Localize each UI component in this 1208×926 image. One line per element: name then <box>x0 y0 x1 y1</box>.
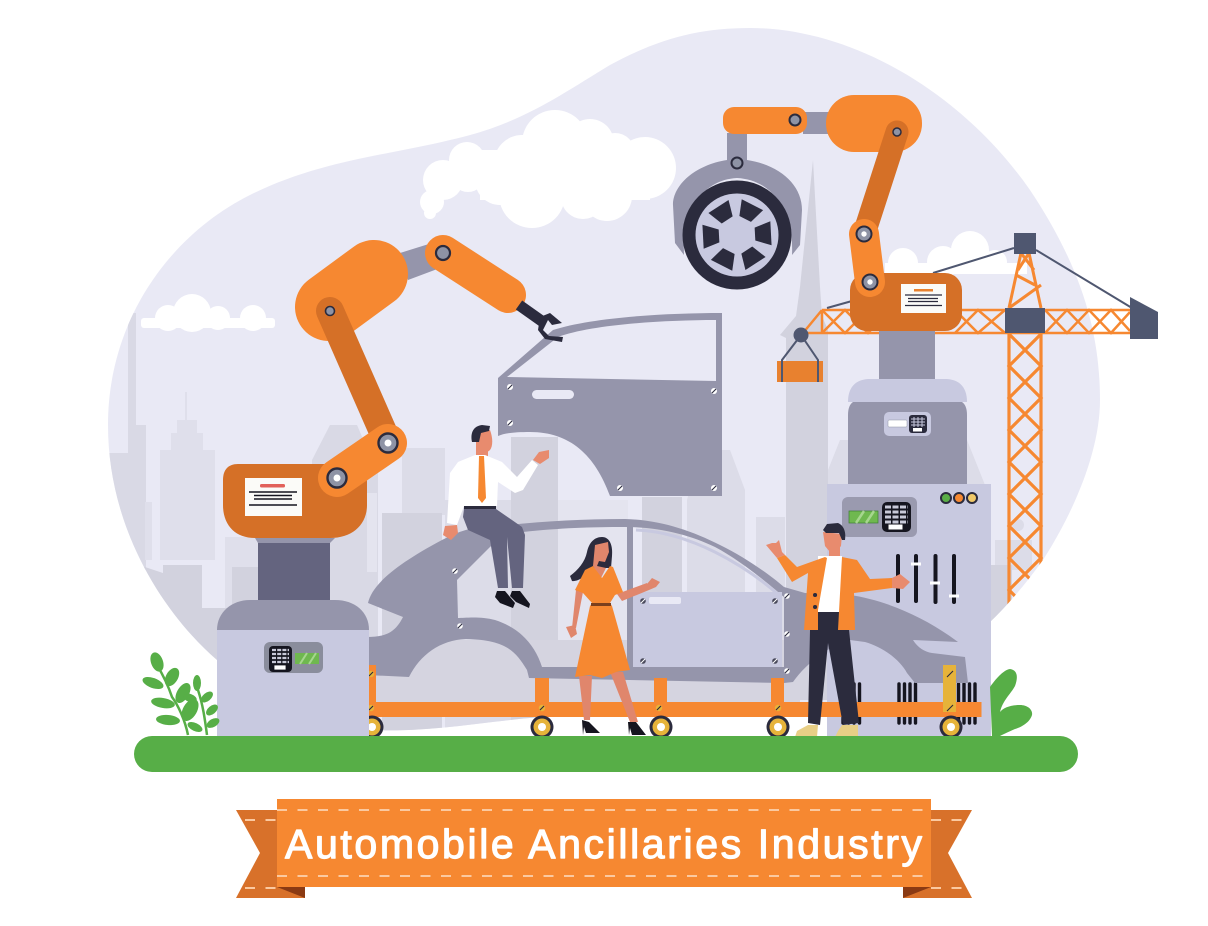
assembly cart <box>360 665 982 738</box>
shoulder <box>329 274 374 307</box>
base control panel <box>264 642 323 673</box>
banner title: Automobile Ancillaries Industry <box>285 821 922 867</box>
shoulder <box>826 95 922 152</box>
b pillar <box>627 527 633 669</box>
plant left <box>141 651 221 735</box>
cart screws <box>368 671 953 711</box>
car screws <box>452 568 790 674</box>
dome cap <box>848 379 967 402</box>
vents <box>843 684 975 723</box>
shirt <box>447 455 538 525</box>
car door handle <box>649 597 681 604</box>
window trim <box>636 530 780 596</box>
crane top box <box>1014 233 1036 254</box>
tie <box>478 456 486 503</box>
man seated on car <box>443 425 549 608</box>
forearm joint <box>790 114 800 126</box>
upper arm <box>330 311 388 443</box>
banner stitches <box>245 810 963 888</box>
head <box>471 425 492 452</box>
tyre clamp <box>673 133 802 255</box>
robot body <box>850 273 962 331</box>
crane jib lattice <box>803 310 1130 333</box>
gray link <box>400 243 440 280</box>
body label <box>901 284 946 313</box>
belt <box>591 603 611 606</box>
background blob <box>108 28 1100 730</box>
indicator lights <box>941 493 977 503</box>
trousers <box>808 610 859 725</box>
tower crane <box>777 233 1158 640</box>
arms <box>566 578 660 638</box>
machine cabinet <box>827 484 991 736</box>
counterweight <box>1130 297 1158 339</box>
forearm <box>443 253 508 295</box>
joints <box>326 246 450 488</box>
crane top frame <box>1009 253 1041 308</box>
gripper <box>519 305 563 342</box>
head <box>823 523 845 552</box>
dome panel <box>884 412 931 436</box>
legs <box>579 672 638 722</box>
control panel <box>842 497 917 537</box>
large smoke cloud <box>420 110 676 228</box>
car door <box>498 313 722 496</box>
left robot arm <box>217 243 563 736</box>
hands <box>766 540 910 589</box>
ground strip <box>134 736 1078 772</box>
forearm <box>723 107 807 134</box>
right machine <box>827 379 991 736</box>
door handle <box>532 390 574 399</box>
city skyline <box>100 160 1032 740</box>
upper arm <box>864 132 897 234</box>
hair <box>570 537 612 581</box>
cart rail <box>369 702 982 717</box>
woman <box>566 537 660 735</box>
heels <box>582 720 646 735</box>
dress <box>575 566 630 678</box>
base cabinet <box>217 630 369 736</box>
trousers <box>463 509 525 588</box>
t-shirt <box>818 556 842 612</box>
front door panel <box>633 592 782 667</box>
left cloud <box>141 294 275 332</box>
sliders <box>898 556 959 602</box>
jacket buttons <box>813 595 817 607</box>
lower arm <box>864 234 870 282</box>
face <box>593 542 609 578</box>
banner folds <box>277 887 931 898</box>
car body shell <box>367 519 968 683</box>
banner tails <box>236 810 305 898</box>
dome body <box>848 402 967 485</box>
body <box>223 464 367 538</box>
banner main <box>277 799 931 887</box>
crane cables <box>827 248 1132 308</box>
tyre <box>682 180 792 290</box>
joints <box>856 128 901 290</box>
arm connector <box>803 112 830 134</box>
neck <box>258 542 330 600</box>
hands and neck <box>443 448 549 540</box>
belt <box>464 506 496 510</box>
shoes <box>495 591 530 608</box>
lower arm <box>337 443 388 478</box>
right cloud <box>885 231 1027 278</box>
right robot arm <box>673 95 962 379</box>
crane centre box <box>1005 308 1045 333</box>
base dome <box>217 600 369 630</box>
man with jacket <box>766 523 910 737</box>
cart posts <box>369 665 784 702</box>
collar <box>255 538 335 543</box>
yellow clamp <box>943 665 956 712</box>
clouds <box>141 110 1027 332</box>
body label <box>245 478 302 516</box>
plant right <box>990 669 1032 736</box>
clamp pin <box>732 158 742 168</box>
crane mast <box>1009 333 1041 640</box>
machine neck <box>879 331 935 379</box>
banner <box>236 799 972 898</box>
door screws <box>507 384 717 491</box>
jacket <box>777 555 892 630</box>
wheels <box>360 716 962 738</box>
shoes <box>795 725 858 737</box>
hook and load <box>777 328 823 382</box>
